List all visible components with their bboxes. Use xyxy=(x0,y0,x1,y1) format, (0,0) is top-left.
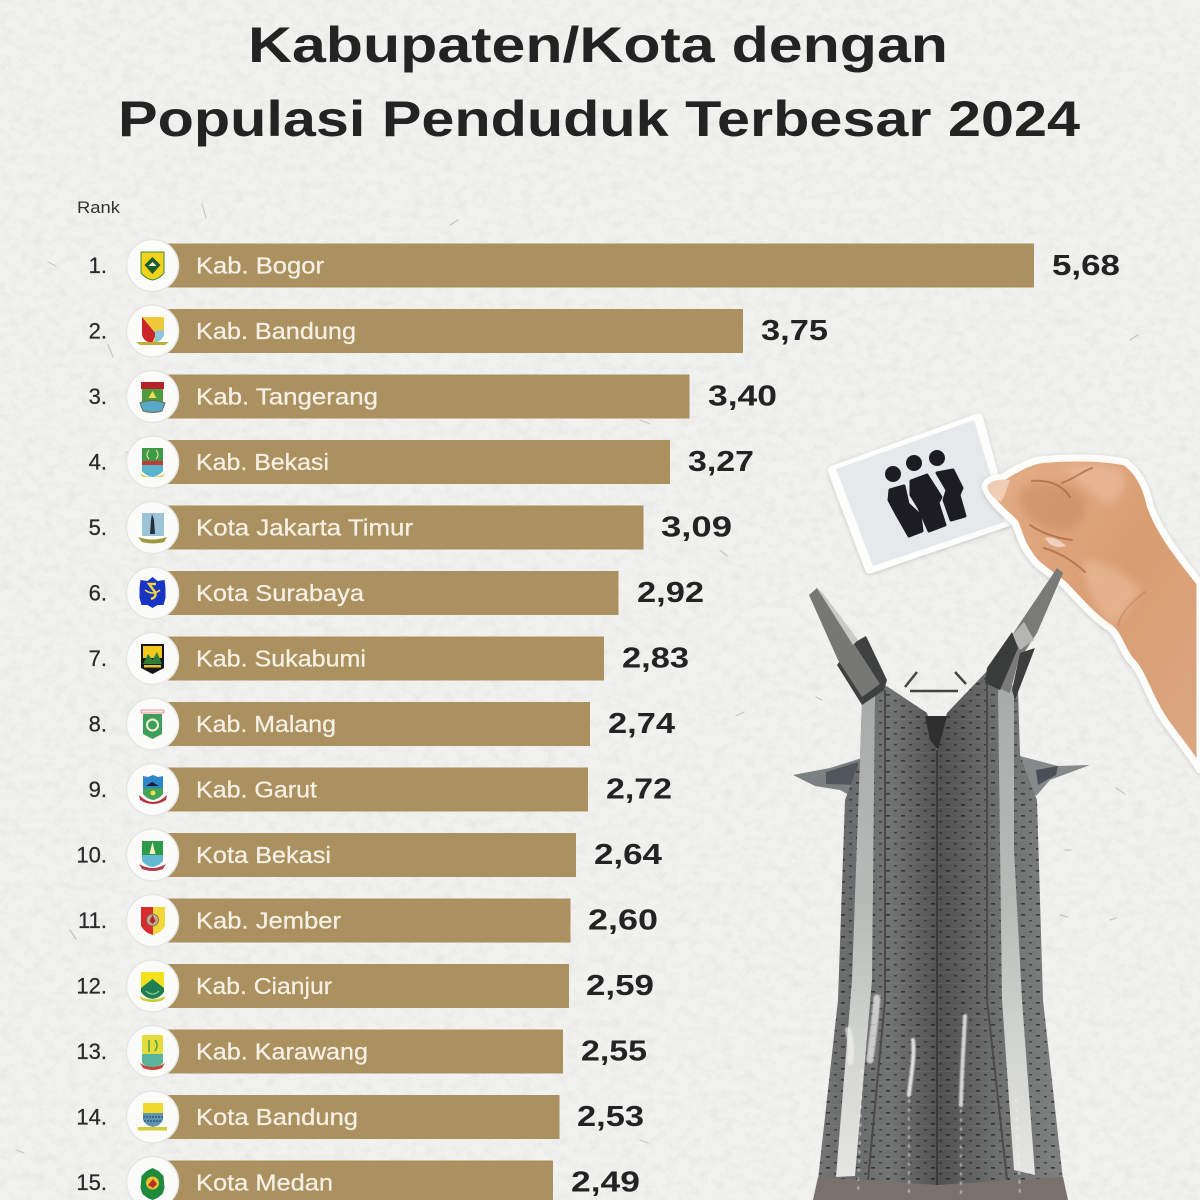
row 12: Kab. Cianjur: 12. xyxy=(76,974,107,998)
row 4: Kab. Bekasi: 4. xyxy=(89,450,107,474)
row 10: Kota Bekasi: 10. xyxy=(76,842,107,868)
row 6: Kota Surabaya: 2,92 xyxy=(637,577,704,609)
row 8: Kab. Malang: Kab. Malang xyxy=(196,711,336,737)
row 1: Kab. Bogor xyxy=(89,240,1120,292)
row 7: Kab. Sukabumi: Kab. Sukabumi xyxy=(196,646,366,672)
row 8: Kab. Malang: 2,74 xyxy=(608,708,675,740)
row 6: Kota Surabaya: Kota Surabaya xyxy=(196,580,364,606)
row 1: Kab. Bogor: 1. xyxy=(89,253,107,278)
tower left spike xyxy=(809,588,887,705)
row 10: Kota Bekasi: Kota Bekasi xyxy=(196,842,331,868)
row 5: Kota Jakarta Timur: 3,09 xyxy=(661,512,732,544)
row 8: Kab. Malang: 8. xyxy=(89,712,107,736)
tower monument xyxy=(793,568,1090,1200)
row 11: Kab. Jember xyxy=(78,894,658,946)
rank column heading: Rank xyxy=(77,199,121,217)
row 12: Kab. Cianjur: Kab. Cianjur xyxy=(196,973,332,999)
row 9: Kab. Garut xyxy=(89,764,672,816)
row 13: Kab. Karawang: 2,55 xyxy=(581,1036,647,1068)
row 12: Kab. Cianjur: 2,59 xyxy=(586,970,654,1002)
card with people icon xyxy=(828,413,1012,574)
row 14: Kota Bandung: 2,53 xyxy=(577,1101,644,1133)
row 2: Kab. Bandung: 2. xyxy=(89,318,107,344)
row 14: Kota Bandung: Kota Bandung xyxy=(196,1104,358,1130)
row 2: Kab. Bandung: 3,75 xyxy=(761,315,828,347)
row 11: Kab. Jember: 11. xyxy=(78,908,107,933)
tower body xyxy=(815,668,1066,1200)
row 4: Kab. Bekasi: 3,27 xyxy=(688,446,754,478)
row 6: Kota Surabaya xyxy=(89,567,704,619)
row 13: Kab. Karawang: Kab. Karawang xyxy=(196,1038,368,1064)
tower top cross bars xyxy=(905,672,966,691)
row 4: Kab. Bekasi xyxy=(89,436,754,488)
title: Kabupaten/Kota dengan xyxy=(248,17,948,73)
title xyxy=(118,17,1080,147)
row 11: Kab. Jember: Kab. Jember xyxy=(196,908,341,934)
row 9: Kab. Garut: Kab. Garut xyxy=(196,776,318,802)
title: Populasi Penduduk Terbesar 2024 xyxy=(118,91,1080,147)
row 6: Kota Surabaya: 6. xyxy=(89,580,107,606)
row 15: Kota Medan xyxy=(76,1156,640,1200)
tower right spike xyxy=(985,568,1063,700)
row 13: Kab. Karawang xyxy=(76,1026,647,1078)
row 7: Kab. Sukabumi: 2,83 xyxy=(622,642,689,674)
row 3: Kab. Tangerang: Kab. Tangerang xyxy=(196,384,378,410)
row 14: Kota Bandung xyxy=(76,1091,644,1143)
tower base xyxy=(813,1177,1068,1200)
fountain jets xyxy=(848,998,1020,1195)
row 8: Kab. Malang xyxy=(89,698,675,750)
row 9: Kab. Garut: 9. xyxy=(89,777,107,802)
row 9: Kab. Garut: 2,72 xyxy=(606,774,672,806)
row 2: Kab. Bandung: Kab. Bandung xyxy=(196,318,356,344)
row 11: Kab. Jember: 2,60 xyxy=(588,904,658,936)
row 5: Kota Jakarta Timur: 5. xyxy=(89,515,107,540)
row 3: Kab. Tangerang: 3. xyxy=(89,384,107,409)
row 5: Kota Jakarta Timur: Kota Jakarta Timur xyxy=(196,514,413,540)
bar chart xyxy=(76,240,1120,1200)
row 7: Kab. Sukabumi xyxy=(89,632,689,684)
finger creases xyxy=(1030,468,1145,625)
row 5: Kota Jakarta Timur xyxy=(89,502,732,554)
row 10: Kota Bekasi xyxy=(76,829,662,881)
hand holding the card xyxy=(985,458,1200,770)
row 10: Kota Bekasi: 2,64 xyxy=(594,839,662,871)
row 7: Kab. Sukabumi: 7. xyxy=(89,646,107,671)
icon: group of people xyxy=(886,452,965,536)
row 2: Kab. Bandung xyxy=(89,305,828,357)
tower centre joint xyxy=(925,716,947,750)
tower side wings xyxy=(793,755,1090,802)
row 3: Kab. Tangerang: 3,40 xyxy=(708,380,777,412)
row 12: Kab. Cianjur xyxy=(76,960,654,1012)
row 1: Kab. Bogor: Kab. Bogor xyxy=(196,252,324,278)
tower light strips xyxy=(836,686,1035,1177)
row 3: Kab. Tangerang xyxy=(89,370,777,422)
row 15: Kota Medan: 2,49 xyxy=(571,1166,640,1198)
row 15: Kota Medan: 15. xyxy=(76,1170,107,1195)
row 1: Kab. Bogor: 5,68 xyxy=(1052,250,1120,282)
row 15: Kota Medan: Kota Medan xyxy=(196,1170,333,1196)
row 13: Kab. Karawang: 13. xyxy=(76,1039,107,1064)
row 4: Kab. Bekasi: Kab. Bekasi xyxy=(196,449,329,475)
row 14: Kota Bandung: 14. xyxy=(76,1104,107,1130)
hand shading xyxy=(1019,464,1140,625)
